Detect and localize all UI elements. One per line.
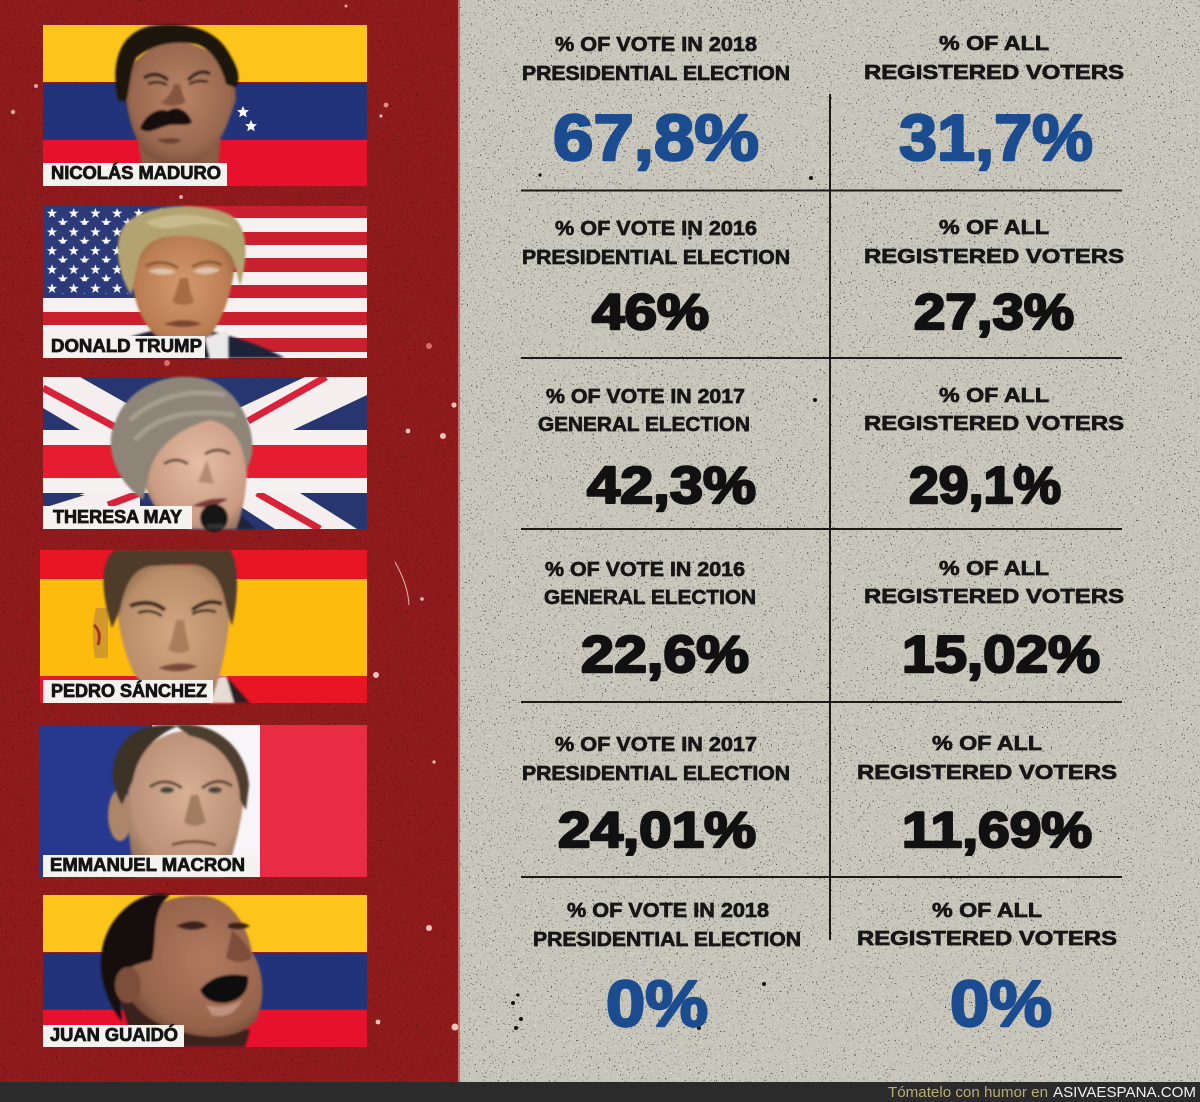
registered heading: % OF ALL	[932, 733, 1042, 755]
registered heading	[864, 558, 1124, 608]
registered heading: REGISTERED VOTERS	[864, 246, 1124, 268]
right stone-grey background panel	[460, 0, 1200, 1082]
registered heading: % OF ALL	[939, 385, 1049, 407]
registered heading: % OF ALL	[939, 558, 1049, 580]
panel: Theresa May	[43, 377, 367, 532]
vote value: 42,3%	[587, 457, 756, 515]
stats row: Sánchez	[544, 558, 1124, 684]
vote heading: PRESIDENTIAL ELECTION	[533, 929, 801, 951]
vote value: 0%	[606, 967, 708, 1040]
vote heading	[522, 34, 790, 85]
flag: France	[40, 725, 367, 877]
registered heading: REGISTERED VOTERS	[864, 62, 1124, 84]
registered heading: REGISTERED VOTERS	[857, 928, 1117, 950]
panel: Juan Guaidó	[43, 894, 367, 1047]
panel: Pedro Sánchez	[40, 550, 367, 703]
panel: Nicolás Maduro	[43, 25, 367, 186]
name label: Juan Guaidó: JUAN GUAIDÓ	[50, 1024, 178, 1045]
vote heading	[522, 734, 790, 785]
vote heading	[538, 386, 750, 436]
registered value: 15,02%	[902, 626, 1100, 684]
name label: Donald Trump: DONALD TRUMP	[51, 336, 202, 356]
vote heading: PRESIDENTIAL ELECTION	[522, 763, 790, 785]
portrait: Maduro	[115, 25, 238, 166]
vote heading: GENERAL ELECTION	[544, 587, 756, 609]
vote heading: % OF VOTE IN 2016	[555, 218, 757, 240]
name label: Pedro Sánchez: PEDRO SÁNCHEZ	[51, 680, 207, 701]
registered value: 11,69%	[902, 802, 1092, 858]
registered heading	[857, 900, 1117, 950]
vote heading	[544, 559, 756, 609]
registered heading	[864, 385, 1124, 435]
left red background panel	[0, 0, 460, 1082]
name label: Emmanuel Macron: EMMANUEL MACRON	[50, 855, 245, 875]
vote heading: GENERAL ELECTION	[538, 414, 750, 436]
vote value: 22,6%	[581, 626, 749, 684]
vote heading: % OF VOTE IN 2017	[555, 734, 757, 756]
stats row: May	[538, 385, 1124, 515]
portrait: Emmanuel Macron	[108, 724, 249, 877]
vote heading	[533, 900, 801, 951]
portrait: Juan Guaidó	[101, 894, 262, 1047]
vote heading: PRESIDENTIAL ELECTION	[522, 63, 790, 85]
registered heading	[864, 33, 1124, 84]
panel: Donald Trump	[43, 206, 367, 358]
name label: Nicolás Maduro: NICOLÁS MADURO	[51, 162, 221, 183]
registered heading: REGISTERED VOTERS	[864, 413, 1124, 435]
vote heading	[522, 218, 790, 269]
registered value: 0%	[950, 967, 1052, 1040]
footer credit bar: ASIVAESPANA.COM	[1053, 1084, 1196, 1101]
flag: Venezuela	[43, 25, 367, 186]
vote value: 46%	[592, 284, 709, 340]
stats row: Maduro	[522, 33, 1124, 174]
registered heading: % OF ALL	[932, 900, 1042, 922]
vote value: 67,8%	[553, 101, 759, 174]
registered heading: REGISTERED VOTERS	[864, 586, 1124, 608]
panel: Emmanuel Macron	[40, 724, 367, 877]
portrait: Pedro Sánchez	[103, 550, 250, 703]
registered value: 31,7%	[899, 101, 1093, 174]
flag: Venezuela	[43, 895, 367, 1047]
registered heading: % OF ALL	[939, 33, 1049, 55]
footer credit bar	[0, 1082, 1200, 1102]
vote heading: % OF VOTE IN 2016	[545, 559, 745, 581]
vote heading: PRESIDENTIAL ELECTION	[522, 247, 790, 269]
vote value: 24,01%	[558, 802, 756, 858]
registered heading: REGISTERED VOTERS	[857, 762, 1117, 784]
stats row: Macron	[522, 733, 1117, 858]
registered heading	[857, 733, 1117, 784]
registered value: 27,3%	[914, 284, 1074, 340]
vote heading: % OF VOTE IN 2018	[555, 34, 757, 56]
stats row: Guaidó	[533, 900, 1117, 1040]
footer credit bar: Tómatelo con humor en	[888, 1084, 1048, 1101]
vote heading: % OF VOTE IN 2018	[567, 900, 769, 922]
vote heading: % OF VOTE IN 2017	[546, 386, 745, 408]
portrait: Trump	[85, 206, 285, 358]
registered value: 29,1%	[909, 457, 1061, 515]
portrait: Theresa May	[111, 377, 256, 532]
stats row: Trump	[522, 217, 1124, 340]
flag: Spain	[40, 550, 367, 703]
registered heading	[864, 217, 1124, 268]
flag: United Kingdom	[43, 377, 367, 529]
registered heading: % OF ALL	[939, 217, 1049, 239]
name label: Theresa May: THERESA MAY	[53, 507, 182, 527]
flag: United States	[43, 206, 367, 358]
